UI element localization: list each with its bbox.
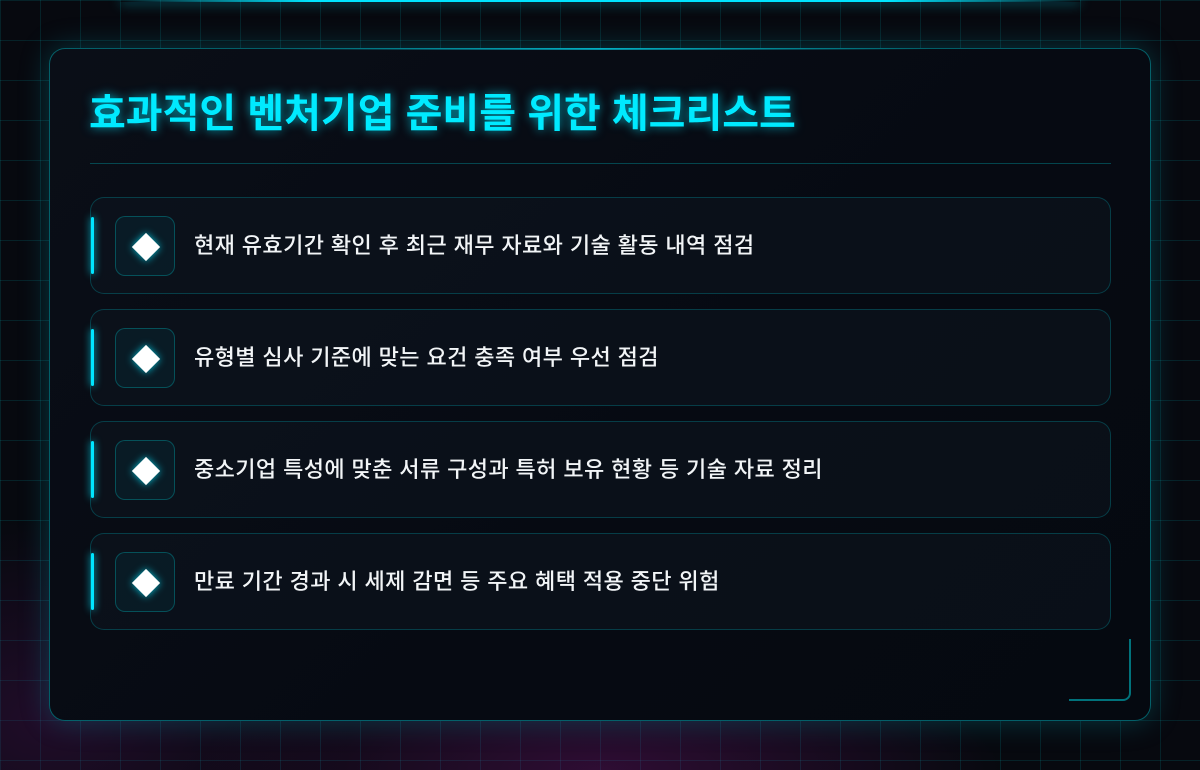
title: 효과적인 벤처기업 준비를 위한 체크리스트 [89, 92, 796, 136]
item 1: 현재 유효기간 확인 후 최근 재무 자료와 기술 활동 내역 점검 [194, 233, 754, 258]
item 3: 중소기업 특성에 맞춘 서류 구성과 특허 보유 현황 등 기술 자료 정리 [194, 457, 823, 482]
item 4: 만료 기간 경과 시 세제 감면 등 주요 혜택 적용 중단 위험 [194, 569, 720, 594]
item 2: 유형별 심사 기준에 맞는 요건 충족 여부 우선 점검 [194, 345, 659, 370]
item 1 [90, 197, 1111, 294]
corner bracket decoration [1069, 639, 1131, 701]
item 2 [90, 309, 1111, 406]
item 3 [90, 421, 1111, 518]
item 4 [90, 533, 1111, 630]
